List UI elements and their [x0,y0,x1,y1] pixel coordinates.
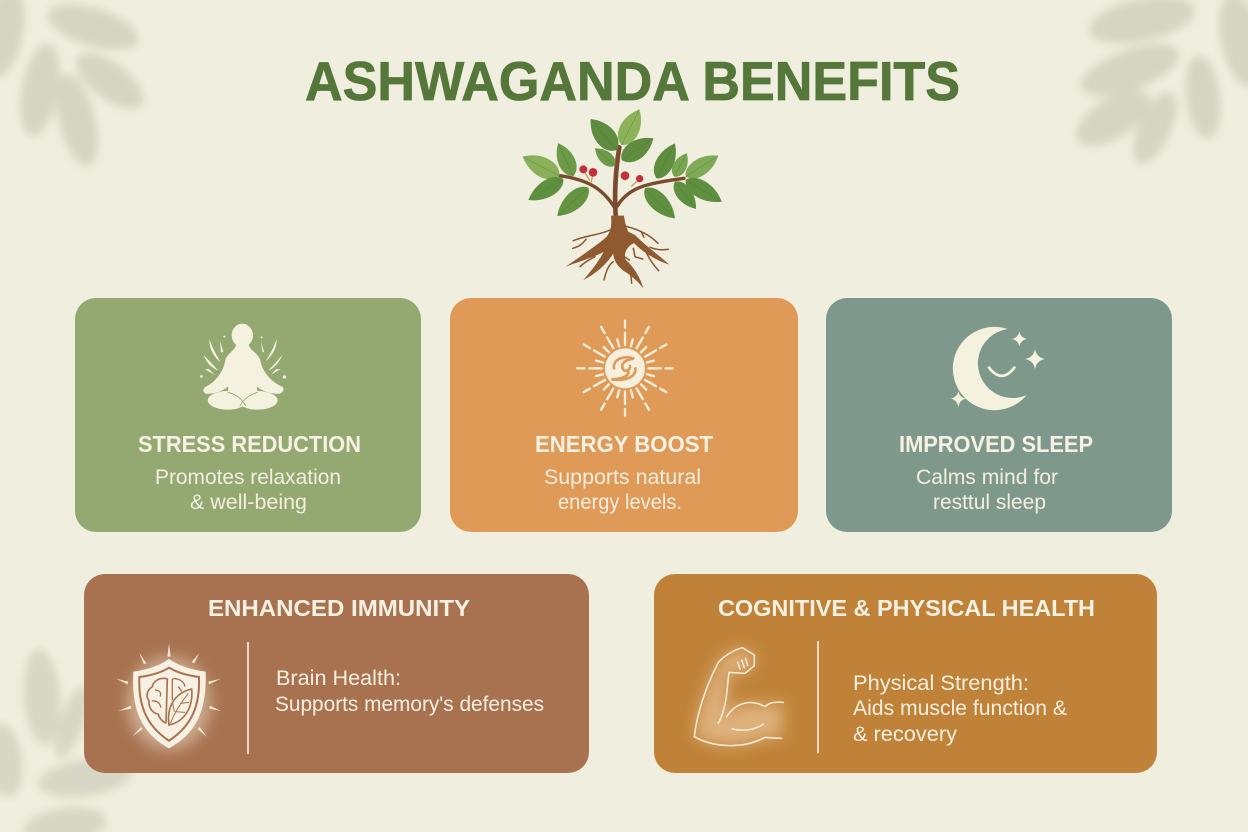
description: Calms mind for [916,466,1058,489]
text: supports memory: Supports memory's defenses [275,693,544,716]
leaf veins [523,109,722,218]
branches [560,147,684,215]
description: Supports natural [544,466,701,489]
description line 2: & well-being [190,491,307,514]
text: aids muscle function: Aids muscle function & [853,697,1067,720]
text: brain health: Brain Health: [276,667,401,690]
decorative leaves: bottom left [0,648,134,832]
berries [579,165,643,182]
heading: STRESS REDUCTION [138,431,361,457]
decorative leaves: top left [0,0,153,170]
icon: meditating figure [200,324,286,410]
heading: IMPROVED SLEEP [899,431,1093,457]
description line 2: energy levels. [558,491,682,514]
text: recovery: & recovery [853,723,958,746]
root body [566,216,669,288]
divider [247,642,249,754]
description: Promotes relaxation [155,466,341,489]
panel: cognitive and physical health [654,574,1157,773]
icon: crescent moon and stars [951,327,1045,410]
text: physical strength: Physical Strength: [853,672,1029,695]
panel: stress reduction [75,298,421,532]
leaves [518,105,726,224]
heading: COGNITIVE & PHYSICAL HEALTH [718,595,1095,621]
decorative leaves: top right [1067,0,1248,170]
heading: ENERGY BOOST [535,431,713,457]
illustration: ashwagandha plant with roots [518,105,726,288]
title: ASHWAGANDA BENEFITS [305,50,960,112]
icon: sun with swirl [577,321,673,416]
panel: enhanced immunity [84,574,589,773]
panel: energy boost [450,298,798,532]
fine roots [573,226,668,283]
heading: ENHANCED IMMUNITY [208,595,470,621]
icon: shield with brain and leaf [116,643,221,750]
divider [817,641,819,753]
panel: improved sleep [826,298,1172,532]
description line 2: resttul sleep [933,491,1046,514]
icon: flexed arm [694,648,783,746]
